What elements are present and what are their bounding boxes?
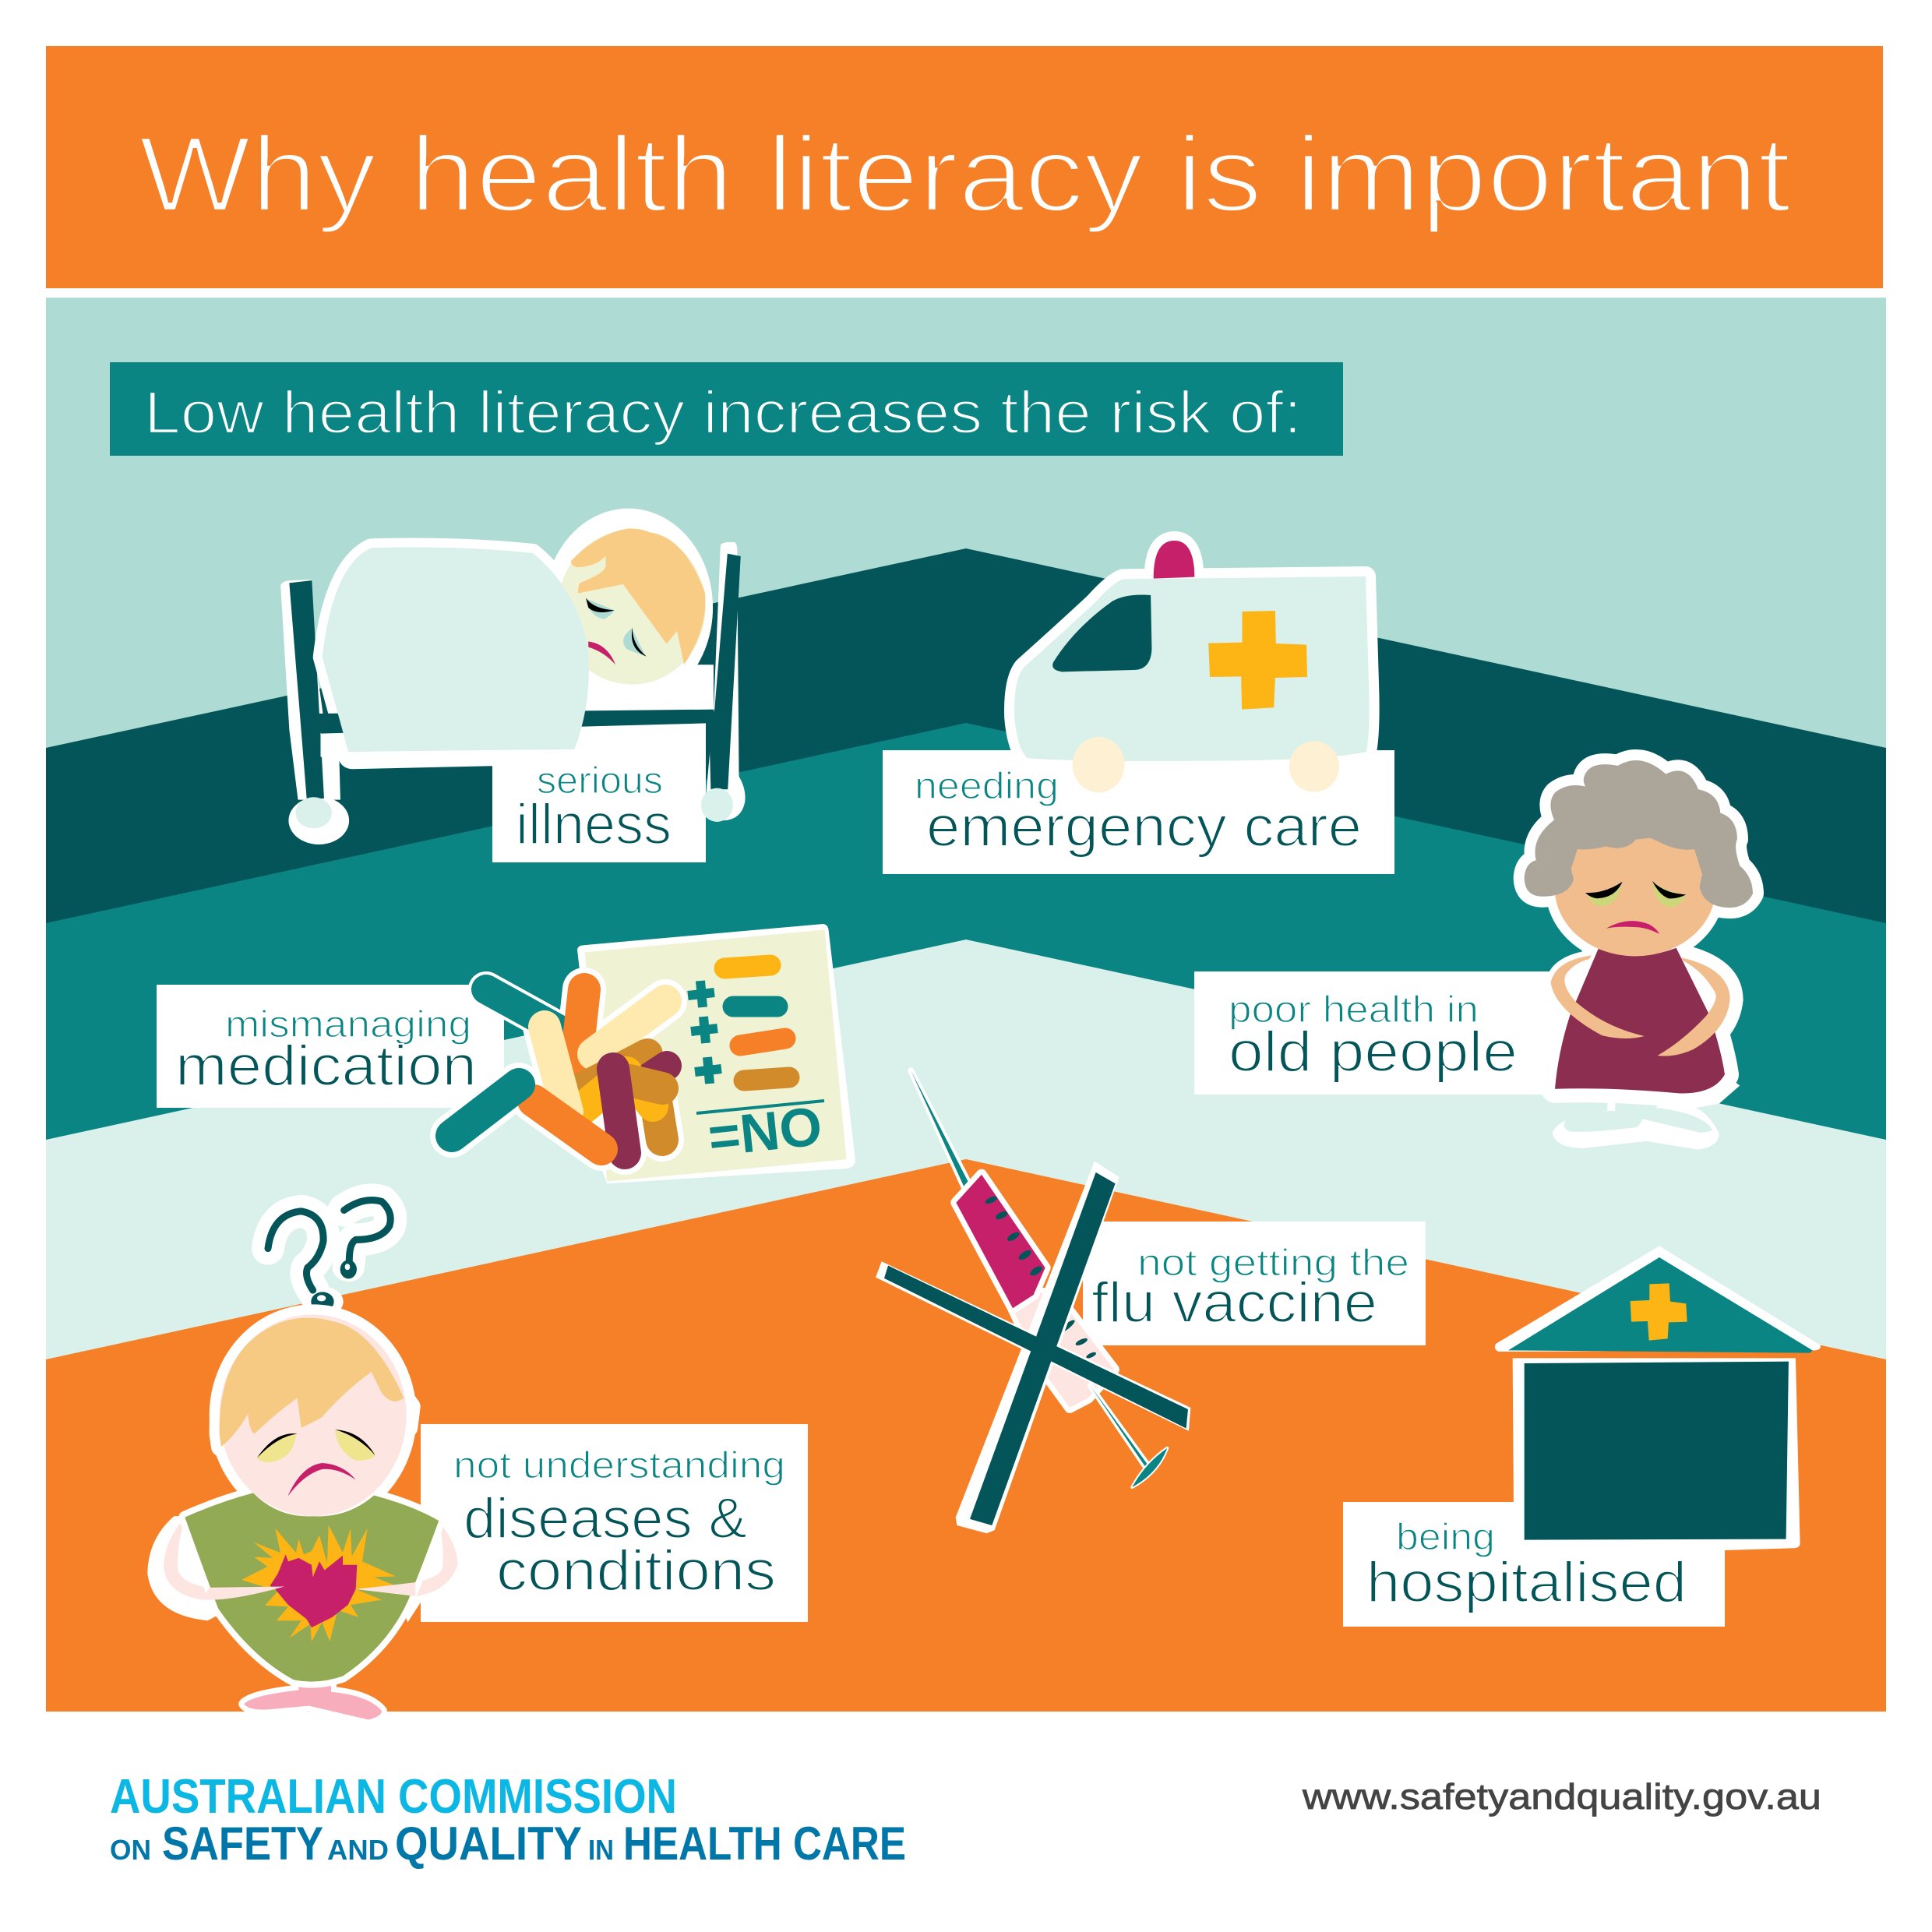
label box: serious illness [492,723,706,862]
list bars and plus signs [688,965,824,1113]
footer logo: Australian Commission: SAFETY [162,1817,323,1870]
footer logo: Australian Commission: ON [110,1834,151,1866]
label box: hospitalised [1343,1502,1725,1627]
footer logo: Australian Commission: IN [588,1834,614,1866]
label text: diseases and conditions [453,1445,785,1602]
panel: not getting the flu vaccine [876,1070,1426,1533]
subheading text: Low health literacy increases the risk of: [144,379,1302,446]
panel: serious illness [280,509,746,862]
label text: needing emergency care: emergency care [926,795,1362,858]
footer logo: Australian Commission [110,1770,906,1870]
panel: needing emergency care [883,541,1394,874]
label text: diseases and conditions: conditions [496,1539,776,1602]
label text: being hospitalised [1366,1517,1687,1614]
label text: mismanaging medication [175,1004,477,1098]
=NO text: =NO [705,1095,825,1168]
label text: mismanaging medication: mismanaging [225,1004,471,1045]
label text: flu vaccine: flu vaccine [1091,1271,1377,1334]
illustration: hospital building [1495,1246,1821,1550]
illustration: person in hospital bed [280,509,746,844]
illustration: ambulance [1014,541,1370,792]
label text: needing emergency care: needing [915,766,1059,807]
panel: poor health in old people [1194,760,1753,1150]
footer logo: Australian Commission: HEALTH CARE [623,1817,906,1870]
pills [452,989,667,1153]
footer website: www.safetyandquality.gov.au [1302,1776,1821,1817]
label text: flu vaccine [1091,1243,1409,1334]
label text: poor health in old people [1229,989,1518,1084]
label text: needing emergency care [915,766,1362,858]
icon: question marks [268,1200,390,1317]
illustration: elderly woman [1525,760,1753,1150]
illustration: confused child with heart pain [147,1200,457,1719]
label text: diseases and conditions: diseases & [464,1487,747,1550]
illustration: medication list with pills [452,924,855,1183]
label text: serious illness [516,760,672,856]
illustration: crossed-out syringe [876,1070,1190,1533]
title: Why health literacy is important [139,115,1791,234]
label box: emergency care [883,750,1394,874]
label text: mismanaging medication: medication [175,1035,477,1098]
label box: flu vaccine [1083,1222,1426,1345]
medication list paper [577,924,855,1183]
background panel with chevron bands [46,298,1886,1712]
label text: poor health in old people: poor health in [1229,989,1479,1031]
label text: serious illness: illness [516,793,672,856]
footer logo: Australian Commission: AUSTRALIAN COMMISSION [110,1770,677,1824]
label text: diseases and conditions: not understanding [453,1445,785,1486]
panel: not understanding diseases and conditions [147,1200,808,1719]
label box: old people [1194,971,1572,1095]
label text: poor health in old people: old people [1229,1021,1518,1084]
label text: flu vaccine: not getting the [1137,1243,1409,1284]
label box: medication [157,985,504,1108]
panel: being hospitalised [1343,1246,1821,1627]
label text: being hospitalised: being [1396,1517,1495,1558]
label box: diseases and conditions [421,1424,808,1622]
label text: being hospitalised: hospitalised [1366,1551,1687,1614]
label text: serious illness: serious [537,760,663,802]
footer logo: Australian Commission: QUALITY [395,1817,582,1870]
panel: mismanaging medication [157,924,855,1183]
subheading bar [110,362,1343,456]
footer logo: Australian Commission: AND [327,1834,389,1866]
header banner [46,46,1883,288]
